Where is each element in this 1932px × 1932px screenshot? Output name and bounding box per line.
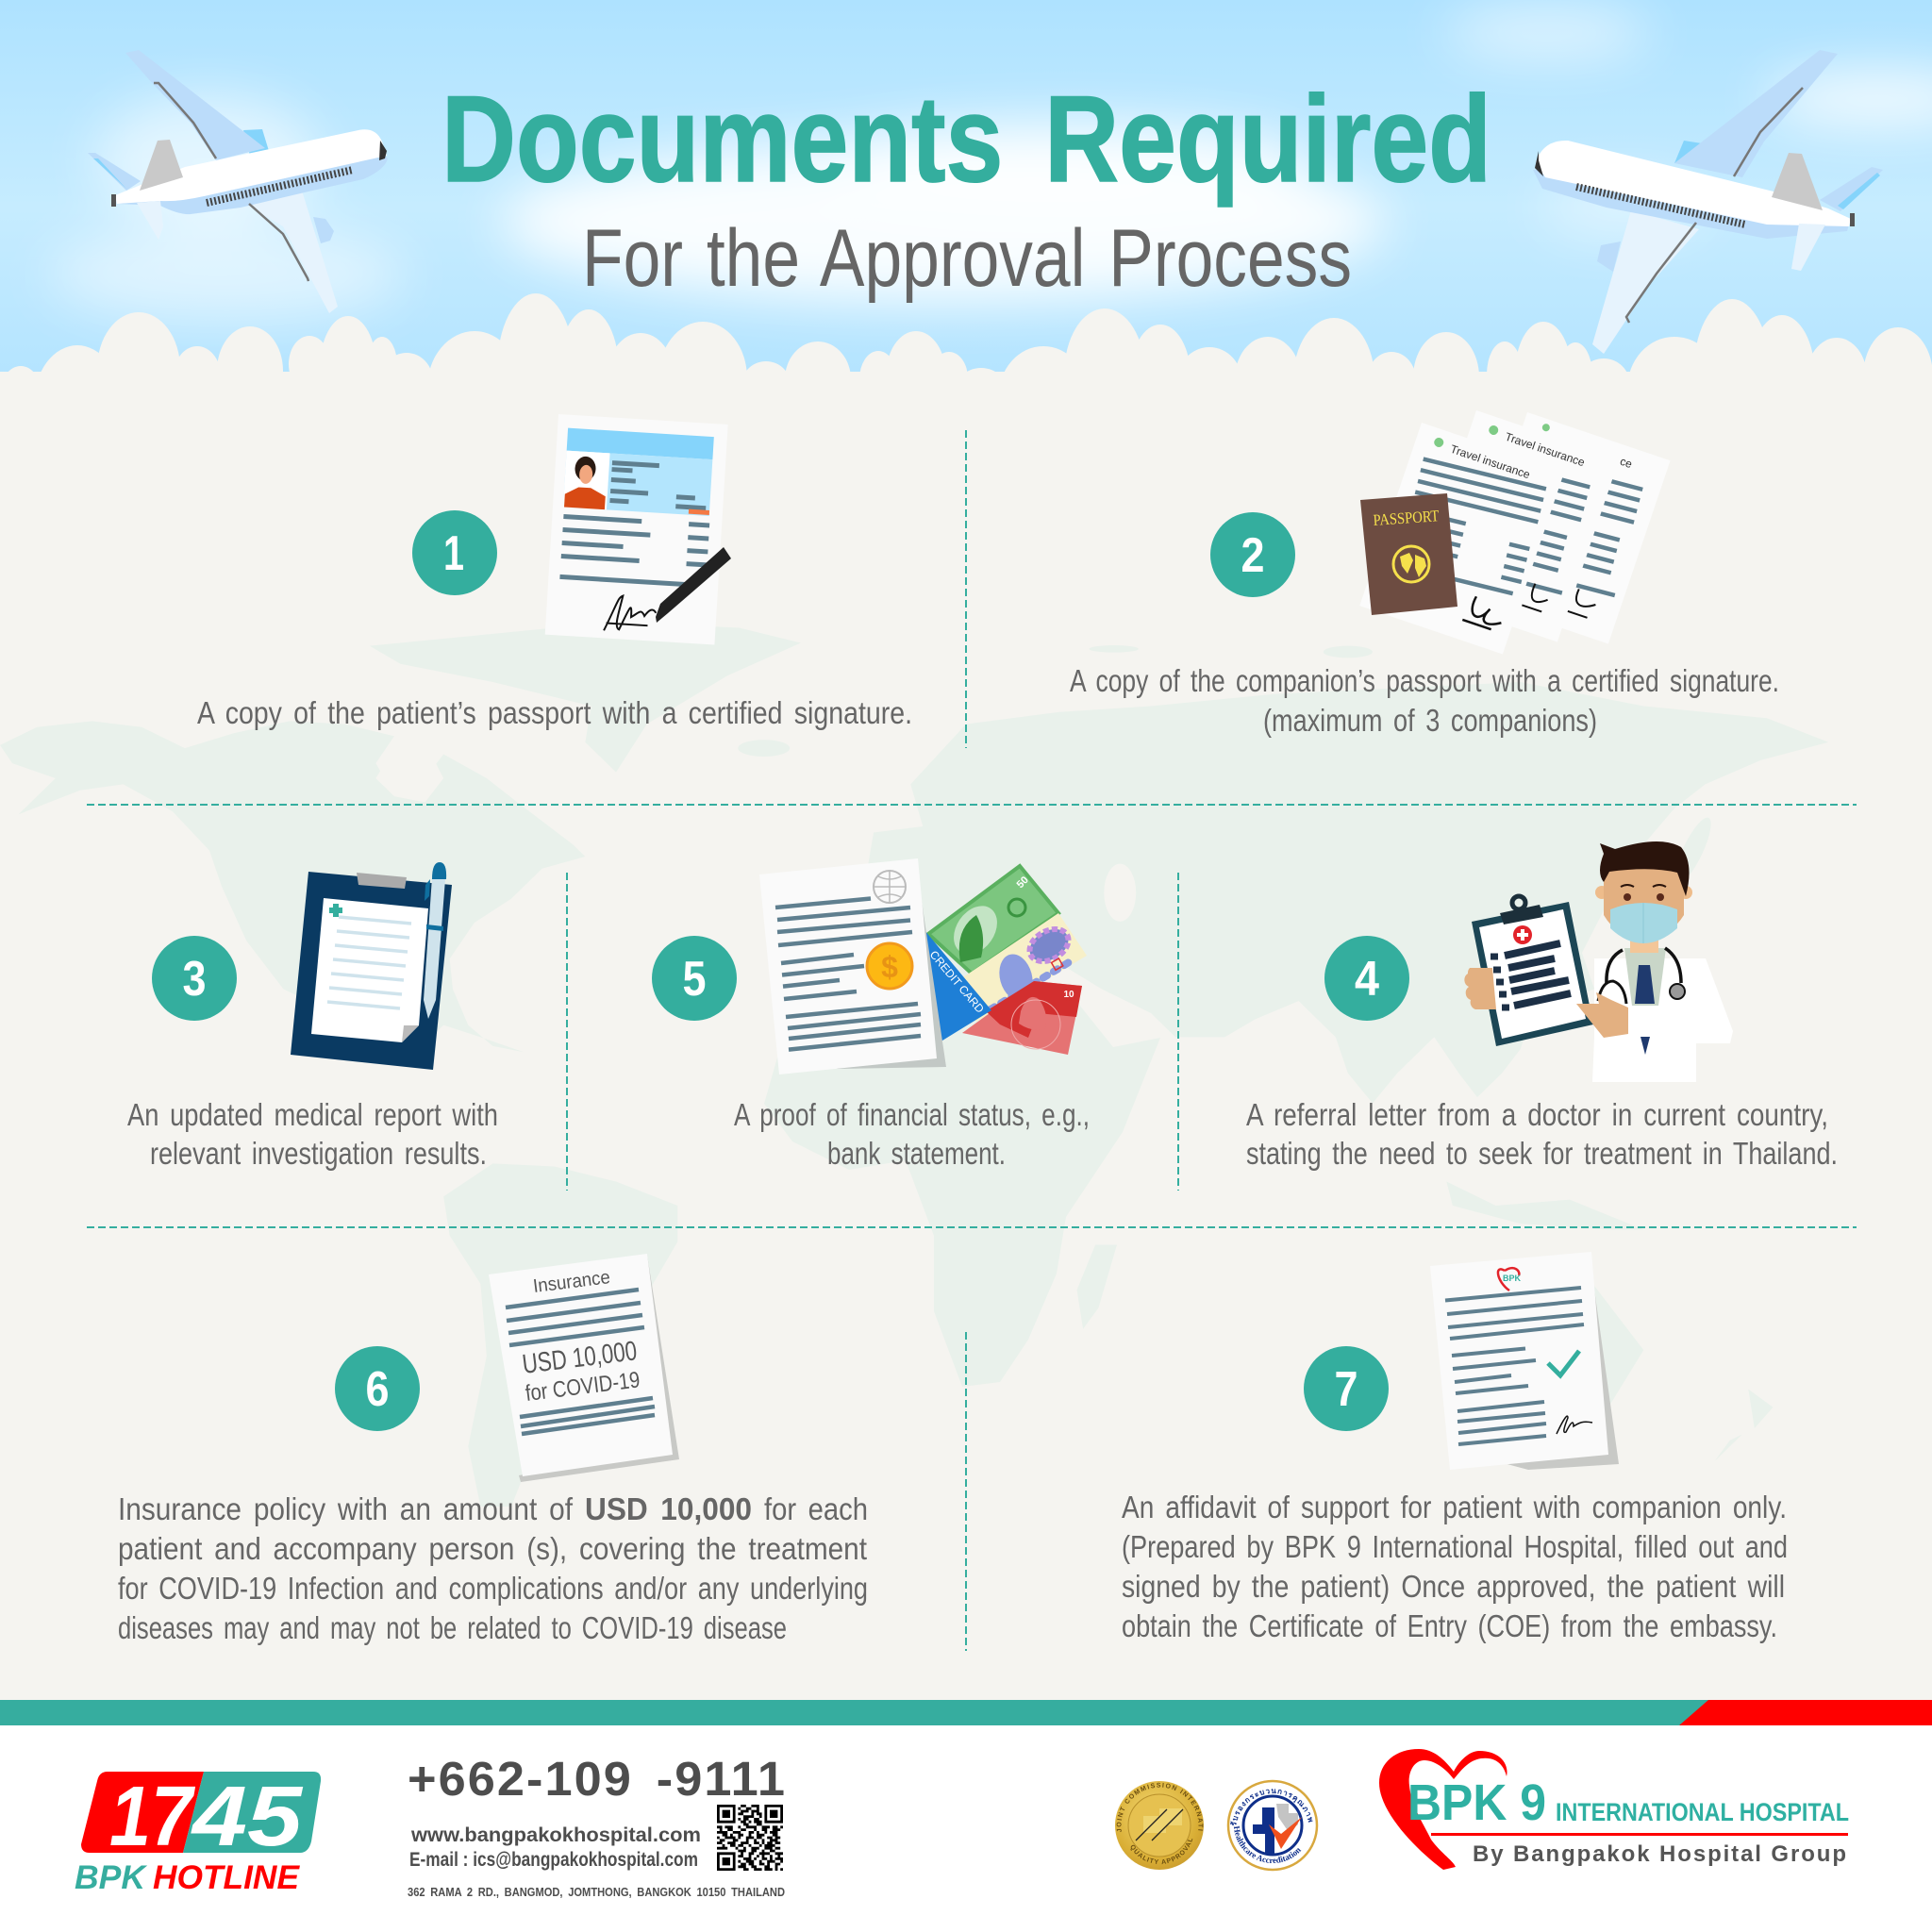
badge 3	[152, 936, 237, 1021]
caption 3: relevant investigation results.	[150, 1136, 487, 1171]
caption 7: An affidavit of support for patient with companion only.	[1122, 1490, 1787, 1524]
badge 4: 4	[1355, 952, 1379, 1007]
icon: signed passport copy	[545, 414, 731, 645]
icon: financial documents and money: $	[881, 950, 898, 984]
contact details: www.bangpakokhospital.com	[410, 1824, 701, 1846]
icon: financial documents and money: 50	[1015, 874, 1031, 891]
hotline logo: BPK	[75, 1859, 148, 1896]
BPK 9 hospital logo	[1379, 1749, 1849, 1870]
badge 6: 6	[366, 1362, 389, 1417]
caption 5	[734, 1097, 1090, 1171]
icon: insurance document	[489, 1254, 679, 1482]
caption 6: for each	[764, 1491, 868, 1526]
icon: financial documents and money: CREDIT CARD	[927, 948, 987, 1016]
caption 3	[127, 1097, 498, 1171]
icon: insurance papers and passport	[1359, 410, 1671, 654]
badge 5: 5	[683, 952, 706, 1007]
badge 1: 1	[443, 526, 464, 581]
icon: insurance document: Insurance	[532, 1267, 611, 1297]
contact details: +662-109 -9111	[408, 1752, 787, 1806]
icon: clipboard medical report	[291, 862, 452, 1070]
caption 5: bank statement.	[827, 1136, 1006, 1171]
QR code	[717, 1805, 783, 1871]
world map	[0, 622, 1828, 1507]
BPK 9 hospital logo: By Bangpakok Hospital Group	[1473, 1841, 1846, 1867]
caption 7: signed by the patient) Once approved, the patient will	[1122, 1569, 1785, 1604]
footer background	[0, 1725, 1932, 1932]
icon: insurance papers and passport: ce	[1618, 455, 1634, 471]
footer band	[0, 1700, 1932, 1725]
icon: insurance papers and passport: PASSPORT	[1373, 507, 1441, 529]
title: Documents Required	[441, 70, 1491, 208]
icon: financial documents and money	[759, 858, 1087, 1074]
badge 7: 7	[1334, 1362, 1358, 1417]
badge 2	[1210, 512, 1295, 597]
JCI seal: QUALITY APPROVAL	[1130, 1839, 1192, 1864]
contact details: 362 RAMA 2 RD., BANGMOD, JOMTHONG, BANGKOK 10150 THAILAND	[408, 1885, 785, 1899]
caption 2: A copy of the companion’s passport with a certified signature.	[1070, 663, 1779, 698]
hotline logo: 45	[191, 1770, 304, 1864]
hotline logo	[75, 1770, 321, 1896]
icon: financial documents and money: 10	[1063, 990, 1074, 1000]
caption 6: USD 10,000	[585, 1491, 752, 1526]
cloud edge	[0, 293, 1932, 462]
JCI seal: JOINT COMMISSION INTERNATIONAL	[1117, 1783, 1204, 1832]
caption 2	[1070, 663, 1779, 738]
contact details	[408, 1752, 787, 1899]
JCI seal	[1115, 1781, 1204, 1870]
badge 3: 3	[183, 952, 206, 1007]
caption 2: (maximum of 3 companions)	[1263, 703, 1597, 738]
icon: insurance papers and passport: Travel insurance	[1449, 442, 1532, 481]
icon: left airplane	[88, 50, 388, 313]
hotline logo: HOTLINE	[153, 1859, 301, 1896]
icon: affidavit document	[1430, 1252, 1619, 1470]
panel: item 3	[127, 862, 498, 1171]
panel: item 2	[1070, 410, 1779, 738]
healthcare accreditation seal: รับรองกระบวนการคุณภาพ	[1230, 1789, 1313, 1826]
BPK 9 hospital logo: INTERNATIONAL HOSPITAL	[1556, 1798, 1849, 1826]
subtitle: For the Approval Process	[582, 213, 1352, 304]
panel: item 4	[1246, 841, 1838, 1171]
icon: insurance papers and passport: Travel insurance	[1504, 430, 1587, 469]
caption 6: patient and accompany person (s), covering the treatment	[118, 1531, 867, 1566]
caption 4: A referral letter from a doctor in current country,	[1246, 1097, 1828, 1132]
panel: item 5	[652, 858, 1090, 1171]
caption 4	[1246, 1097, 1838, 1171]
caption 6: diseases may and may not be related to COVID-19 disease	[118, 1610, 787, 1645]
caption 6	[118, 1491, 868, 1645]
icon: right airplane	[1533, 50, 1883, 354]
BPK 9 hospital logo: BPK 9	[1407, 1774, 1546, 1831]
badge 6	[335, 1346, 420, 1431]
caption 6: for COVID-19 Infection and complications and/or any underlying	[118, 1571, 868, 1606]
icon: affidavit document: BPK	[1503, 1274, 1522, 1283]
badge 5	[652, 936, 737, 1021]
icon: insurance document: for COVID-19	[524, 1367, 641, 1407]
dashed dividers	[87, 430, 1857, 1651]
healthcare accreditation seal	[1226, 1779, 1319, 1872]
caption 3: An updated medical report with	[127, 1097, 498, 1132]
icon: doctor with clipboard	[1464, 841, 1733, 1082]
icon: insurance document: USD 10,000	[521, 1336, 639, 1380]
panel: item 1	[197, 414, 912, 730]
caption 7: (Prepared by BPK 9 International Hospital, filled out and	[1122, 1529, 1788, 1564]
caption 1: A copy of the patient’s passport with a certified signature.	[197, 695, 912, 730]
caption 5: A proof of financial status, e.g.,	[734, 1097, 1090, 1132]
badge 2: 2	[1241, 528, 1264, 583]
badge 1	[412, 510, 497, 595]
caption 6: Insurance policy with an amount of	[118, 1491, 574, 1526]
page background	[0, 372, 1932, 1702]
caption 7: obtain the Certificate of Entry (COE) from the embassy.	[1122, 1608, 1777, 1643]
healthcare accreditation seal: Healthcare Accreditation	[1234, 1825, 1302, 1863]
panel: item 6	[118, 1254, 868, 1645]
sky background	[0, 0, 1932, 377]
badge 7	[1304, 1346, 1389, 1431]
contact details: E-mail : ics@bangpakokhospital.com	[409, 1849, 698, 1871]
caption 7	[1122, 1490, 1788, 1643]
panel: item 7	[1122, 1252, 1788, 1643]
badge 4	[1324, 936, 1409, 1021]
hotline logo: 17	[109, 1770, 195, 1864]
